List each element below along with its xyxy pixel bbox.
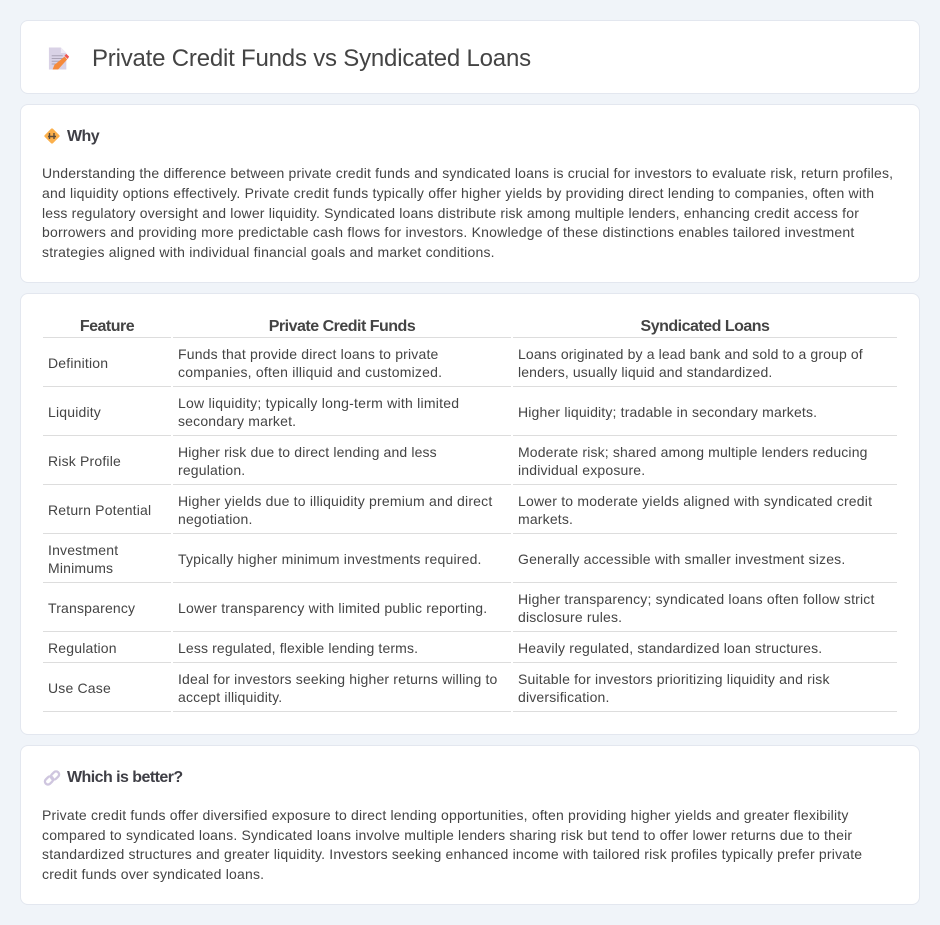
text: why paragraph: less regulatory oversight and lower liquidity. Syndicated loans distribute risk among multiple lenders, enhancing credit access for (42, 205, 859, 221)
panel: comparison table (20, 293, 920, 735)
panel: which is better (20, 745, 920, 905)
text: which is better paragraph: credit funds over syndicated loans. (42, 866, 264, 882)
panel: title (20, 20, 920, 94)
table: comparison: Higher transparency; syndicated loans often follow strict (518, 591, 875, 607)
table: comparison: Suitable for investors prioritizing liquidity and risk (518, 671, 830, 687)
text: which is better paragraph: Private credit funds offer diversified exposure to direct lending opportunities, often providing higher yields and greater flexibility (42, 807, 849, 823)
table: comparison: secondary market. (178, 413, 296, 429)
table: comparison: individual exposure. (518, 462, 645, 478)
table: comparison: Risk Profile (48, 453, 121, 469)
heading: which is better: Which is better? (67, 769, 183, 786)
text: which is better paragraph: compared to syndicated loans. Syndicated loans involve multiple lenders sharing risk but tend to offer lower returns due to their (42, 827, 852, 843)
table: comparison: Lower to moderate yields aligned with syndicated credit (518, 493, 872, 509)
table: comparison: Generally accessible with smaller investment sizes. (518, 551, 845, 567)
table: comparison: disclosure rules. (518, 609, 622, 625)
table: comparison: Typically higher minimum investments required. (178, 551, 482, 567)
table: comparison: negotiation. (178, 511, 253, 527)
text: why paragraph: Understanding the difference between private credit funds and syndicated loans is crucial for investors to evaluate risk, return profiles, (42, 165, 893, 181)
table: comparison: Funds that provide direct loans to private (178, 346, 438, 362)
table: comparison: Definition (48, 355, 108, 371)
table: comparison: Use Case (48, 680, 111, 696)
text: why paragraph: strategies aligned with individual financial goals and market conditions. (42, 244, 495, 260)
table: comparison: Higher liquidity; tradable in secondary markets. (518, 404, 817, 420)
table header: feature: Feature (80, 318, 134, 335)
table: comparison: regulation. (178, 462, 245, 478)
table header: private credit funds: Private Credit Funds (269, 318, 415, 335)
table: comparison: companies, often illiquid and customized. (178, 364, 442, 380)
table: comparison: Less regulated, flexible lending terms. (178, 640, 418, 656)
icon: warning diamond (44, 128, 60, 144)
table: comparison: Minimums (48, 560, 113, 576)
text: why paragraph: borrowers and providing more predictable cash flows for investors. Knowledge of these distinctions enables tailored investment (42, 224, 854, 240)
table: comparison: diversification. (518, 689, 610, 705)
table: comparison: Higher yields due to illiquidity premium and direct (178, 493, 492, 509)
icon: chain link (44, 770, 60, 786)
table: comparison: Heavily regulated, standardized loan structures. (518, 640, 822, 656)
table: comparison: Low liquidity; typically long-term with limited (178, 395, 459, 411)
table: comparison: Higher risk due to direct lending and less (178, 444, 437, 460)
table: comparison: Regulation (48, 640, 117, 656)
title: Private Credit Funds vs Syndicated Loans (92, 45, 531, 72)
table: comparison: Ideal for investors seeking higher returns willing to (178, 671, 498, 687)
panel: why (20, 104, 920, 283)
heading: why: Why (67, 128, 99, 145)
text: why paragraph: and liquidity options effectively. Private credit funds typically offer higher yields by providing direct lending to companies, often with (42, 185, 874, 201)
table: comparison: Return Potential (48, 502, 151, 518)
text: which is better paragraph: standardized structures and greater liquidity. Investors seeking enhanced income with tailored risk profiles typically prefer private (42, 846, 862, 862)
table: comparison: Investment (48, 542, 118, 558)
icon: document with pencil (49, 48, 69, 70)
table: comparison: markets. (518, 511, 573, 527)
table: comparison: accept illiquidity. (178, 689, 282, 705)
table: comparison: Lower transparency with limited public reporting. (178, 600, 487, 616)
table: comparison: Moderate risk; shared among multiple lenders reducing (518, 444, 868, 460)
table: comparison: lenders, usually liquid and standardized. (518, 364, 772, 380)
table: comparison: Liquidity (48, 404, 101, 420)
table: comparison: Loans originated by a lead bank and sold to a group of (518, 346, 863, 362)
table header: syndicated loans: Syndicated Loans (641, 318, 769, 335)
table: comparison: Transparency (48, 600, 135, 616)
